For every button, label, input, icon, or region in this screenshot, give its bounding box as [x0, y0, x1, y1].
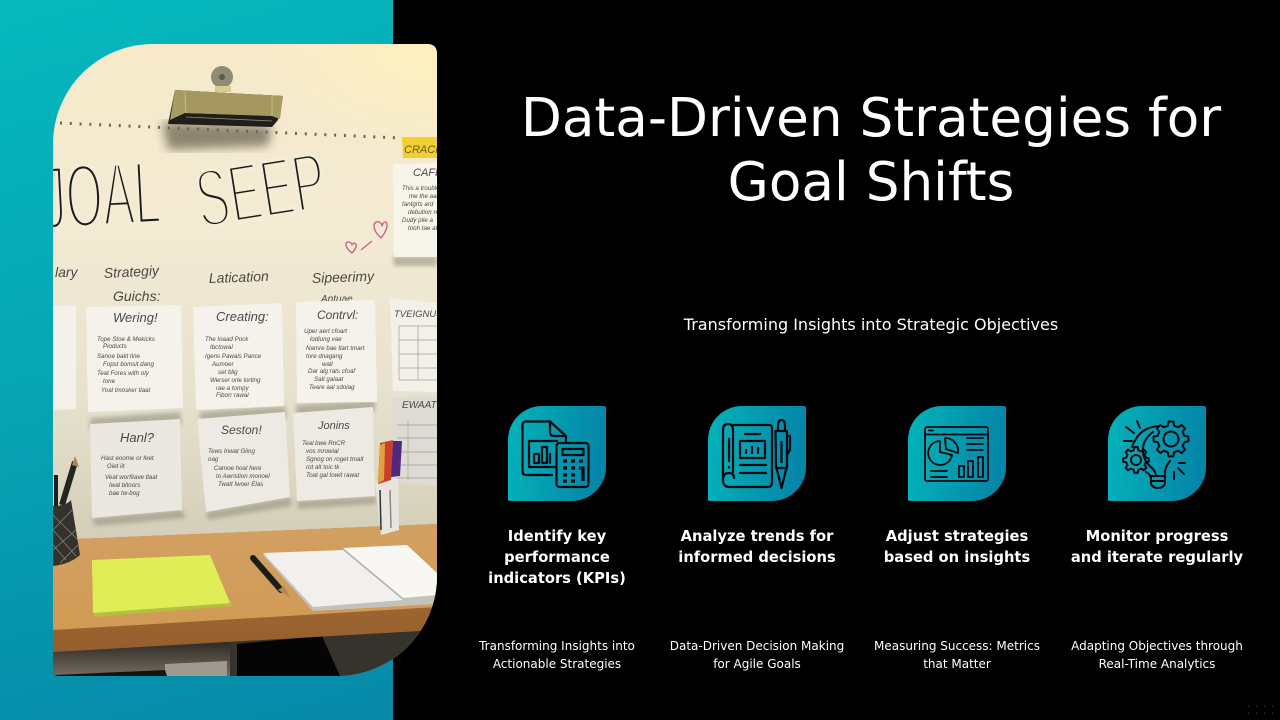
heading: [1071, 528, 1243, 566]
paper handwriting: rot alt toic tk: [306, 464, 340, 471]
paper handwriting: Seston!: [221, 423, 262, 437]
subtitle: Transforming Insights into Strategic Objectives: [684, 315, 1058, 334]
paper handwriting: tooh tae at: [408, 225, 438, 232]
paper handwriting: Contrvl:: [317, 308, 358, 322]
paper handwriting: Sgnog on roget tmalt: [306, 456, 364, 463]
caption: Transforming Insights into: [479, 639, 635, 653]
paper handwriting: bae tw-bog: [109, 490, 140, 497]
paper handwriting: vos mrowial: [306, 448, 339, 455]
caption: [479, 639, 635, 671]
column labels: Strategiy: [103, 262, 160, 281]
caption: [1071, 639, 1243, 671]
heading: Analyze trends for: [681, 528, 833, 545]
paper handwriting: Twatt Iwoer Elas: [218, 481, 263, 488]
paper handwriting: Sanoe bakt tine: [97, 353, 141, 360]
paper handwriting: Toat gal Iowit rawat: [306, 472, 359, 479]
paper handwriting: Veat worfitave tlaat: [105, 474, 158, 481]
heading: [678, 528, 836, 566]
desk: [53, 524, 437, 680]
paper handwriting: Tews Inwat Giing: [208, 448, 255, 455]
wall heading handwriting: JOAL: [40, 143, 163, 249]
heading: Monitor progress: [1086, 528, 1228, 545]
paper handwriting: set blig: [218, 369, 238, 376]
paper handwriting: Teal bwe RnCR: [302, 440, 346, 447]
paper handwriting: fantgrts ard: [402, 201, 434, 208]
caption: [874, 639, 1040, 671]
hearts: [346, 222, 387, 253]
step 1: identify KPIs: [479, 406, 635, 671]
column labels: [55, 265, 375, 302]
paper handwriting: Dudy plie a: [402, 217, 434, 224]
step 2: analyze trends: [670, 406, 844, 671]
panel: teal gradient side band: [0, 0, 393, 720]
pencil cup: [53, 456, 80, 566]
paper handwriting: Jonins: [317, 420, 350, 432]
title: [521, 87, 1222, 213]
heading: performance: [504, 549, 610, 566]
pen on desk: [253, 558, 291, 598]
title: Data-Driven Strategies for: [521, 87, 1221, 149]
icon: lightbulb with gears: [1108, 406, 1206, 501]
paper handwriting: Dar alg rats cfoaf: [308, 368, 356, 375]
paper handwriting: The Ioaad Pock: [205, 336, 249, 343]
paper handwriting: Hast eoome or feet: [101, 455, 154, 462]
paper handwriting: Igens Pawals Pance: [205, 353, 262, 360]
paper handwriting: wall: [322, 361, 333, 368]
column labels: Latication: [209, 268, 269, 286]
heading: Adjust strategies: [886, 528, 1028, 545]
caption: [670, 639, 844, 671]
caption: Actionable Strategies: [493, 657, 621, 671]
column labels: Guichs:: [113, 288, 161, 304]
paper handwriting: tone: [103, 378, 116, 385]
wall heading handwriting: SEEP: [190, 136, 332, 246]
paper handwriting: CRACI: [404, 144, 438, 156]
icon: dashboard window: [908, 406, 1006, 501]
open notebook: [263, 545, 437, 611]
paper handwriting: Creating:: [216, 309, 269, 324]
paper handwriting: [97, 144, 443, 497]
wall heading handwriting: [53, 156, 320, 227]
heading: based on insights: [884, 549, 1030, 566]
paper handwriting: Giet iit: [107, 463, 125, 470]
paper handwriting: Salt galaat: [314, 376, 344, 383]
step 3: adjust strategies: [874, 406, 1040, 671]
caption: that Matter: [923, 657, 991, 671]
photo: goal planning wall and desk: [53, 44, 437, 676]
paper handwriting: Fopst bomsit dang: [103, 361, 154, 368]
paper handwriting: Werser orle lorting: [210, 377, 261, 384]
paper handwriting: Teare aal sdoiag: [309, 384, 355, 391]
column labels: lary: [55, 264, 79, 280]
paper handwriting: Hanl?: [120, 430, 155, 445]
paper handwriting: Namre bae tlart tmart: [306, 345, 365, 352]
paper handwriting: me the aan: [409, 193, 440, 200]
paper handwriting: Wering!: [113, 310, 158, 325]
heading: Identify key: [508, 528, 606, 545]
icon: document and calculator: [508, 406, 606, 501]
paper handwriting: to Awristion monoel: [216, 473, 270, 480]
sticky papers: [53, 137, 437, 526]
paper handwriting: Tope Stoe & Mekicks: [97, 336, 155, 343]
caption: for Agile Goals: [713, 657, 801, 671]
paper handwriting: Fiborr rawal: [216, 392, 249, 399]
paper handwriting: Iwal bitoors: [109, 482, 140, 489]
heading: and iterate regularly: [1071, 549, 1243, 566]
heading: informed decisions: [678, 549, 836, 566]
yellow notepad: [92, 555, 232, 617]
paper handwriting: This a trouble: [402, 185, 440, 192]
title: Goal Shifts: [728, 151, 1014, 213]
heading: [884, 528, 1030, 566]
paper handwriting: Uper aert cfoart: [304, 328, 347, 335]
step 4: monitor progress: [1071, 406, 1243, 671]
paper handwriting: lodiung vae: [310, 336, 342, 343]
marker holder: [375, 440, 402, 535]
paper handwriting: Pioducts: [103, 343, 127, 350]
paper handwriting: EWAAT: [402, 400, 438, 411]
paper handwriting: rae a tompy: [216, 385, 250, 392]
heading: indicators (KPIs): [488, 570, 626, 587]
paper tables: [397, 326, 437, 480]
caption: Measuring Success: Metrics: [874, 639, 1040, 653]
caption: Real-Time Analytics: [1099, 657, 1215, 671]
lamp: [162, 66, 283, 150]
paper handwriting: Ibctowal: [210, 344, 233, 351]
paper handwriting: Teat Fores with oly: [97, 370, 150, 377]
icon: report book and pen: [708, 406, 806, 501]
heading: [488, 528, 626, 587]
caption: Adapting Objectives through: [1071, 639, 1243, 653]
paper handwriting: Aumoer: [211, 361, 235, 368]
paper handwriting: Yoal tmosker tlaat: [101, 387, 150, 394]
column labels: Sipeerimy: [312, 268, 375, 286]
paper handwriting: tore dnagang: [306, 353, 343, 360]
column labels: Antuae: [320, 294, 353, 305]
paper handwriting: Camoe hoal here: [214, 465, 262, 472]
paper handwriting: oag: [208, 456, 219, 463]
caption: Data-Driven Decision Making: [670, 639, 844, 653]
